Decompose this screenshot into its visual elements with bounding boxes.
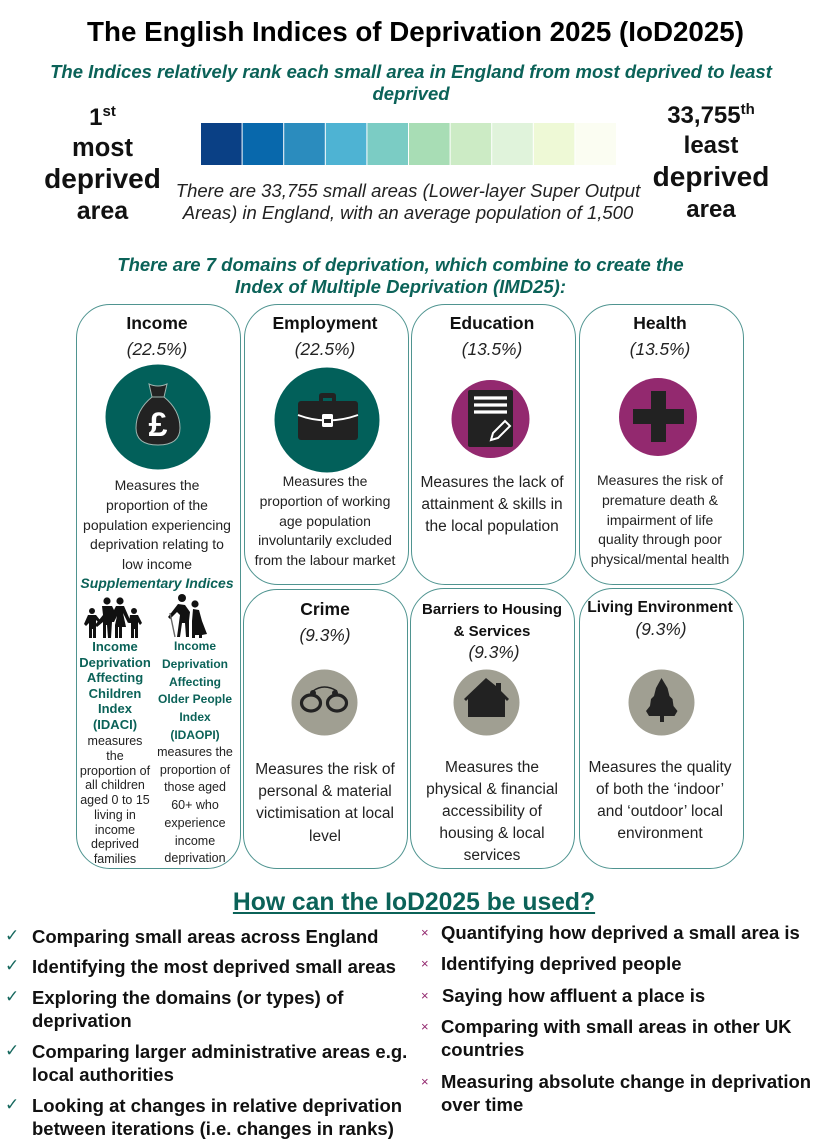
domains heading: Index of Multiple Deprivation (IMD25):: [235, 276, 566, 297]
label: 1st most deprived area: area: [77, 197, 128, 225]
IDACI title: Affecting: [87, 670, 143, 685]
label: 1st most deprived area: most: [72, 134, 133, 162]
check item: ✓: [5, 926, 19, 945]
income description: low income: [122, 556, 192, 572]
icon: family: [84, 597, 142, 638]
list: appropriate uses: [5, 926, 407, 1139]
health description: quality through poor: [598, 531, 722, 547]
cross item: [421, 1071, 811, 1115]
IDAOPI description: those aged: [164, 780, 226, 794]
employment description: from the labour market: [255, 552, 395, 568]
education description: the local population: [425, 518, 559, 535]
IDAOPI title: Older People: [158, 692, 232, 706]
living environment heading: Living Environment: [587, 599, 733, 616]
check item: ✓: [5, 987, 19, 1006]
domains heading: [117, 254, 684, 297]
domains heading: There are 7 domains of deprivation, which combine to create the: [117, 254, 684, 275]
health description: physical/mental health: [591, 551, 729, 567]
subtitle: The Indices relatively rank each small area in England from most deprived to least: [50, 61, 772, 82]
colour scale bar: [201, 123, 616, 165]
check item: Identifying the most deprived small areas: [32, 956, 396, 977]
IDACI description: deprived: [91, 837, 139, 851]
education description: attainment & skills in: [421, 496, 563, 513]
panel: income: [76, 304, 241, 869]
health description: premature death &: [602, 492, 718, 508]
subtitle: deprived: [372, 83, 450, 104]
supplementary heading: Supplementary Indices: [80, 575, 234, 591]
income description: [83, 477, 231, 572]
usage heading: How can the IoD2025 be used?: [233, 889, 595, 916]
panel: living environment: [579, 588, 744, 869]
cross item: over time: [441, 1094, 523, 1115]
barriers description: accessibility of: [442, 803, 542, 820]
cross item: [421, 1016, 792, 1060]
crime description: level: [309, 828, 341, 845]
education description: [420, 474, 564, 535]
income heading: Income: [126, 313, 188, 333]
cross item: ×: [421, 988, 429, 1003]
IDACI description: [80, 734, 150, 866]
IDACI title: [79, 639, 151, 732]
IDACI description: all children: [85, 778, 145, 792]
icon: handcuffs: [292, 670, 358, 736]
subtitle: [50, 61, 772, 104]
IDAOPI description: [157, 745, 233, 865]
health description: Measures the risk of: [597, 472, 723, 488]
barriers description: [426, 759, 558, 864]
employment description: Measures the: [283, 473, 367, 489]
cross item: Quantifying how deprived a small area is: [441, 922, 800, 943]
scale caption: [176, 180, 641, 223]
crime description: [255, 761, 395, 845]
IDAOPI description: 60+ who: [171, 798, 219, 812]
IDACI title: Income: [92, 639, 138, 654]
IDACI description: living in: [94, 808, 136, 822]
IDAOPI title: (IDAOPI): [170, 728, 220, 742]
employment weight: (22.5%): [295, 339, 355, 359]
icon: money bag: [106, 364, 210, 470]
icon: older people: [168, 594, 207, 638]
icon: house: [454, 670, 520, 736]
icon: medical cross: [619, 378, 697, 456]
check item: ✓: [5, 1041, 19, 1060]
cross item: ×: [421, 1019, 429, 1034]
check item: Looking at changes in relative deprivation: [32, 1095, 402, 1116]
check item: Comparing small areas across England: [32, 926, 378, 947]
scale caption: There are 33,755 small areas (Lower-layer Super Output: [176, 180, 640, 201]
check item: ✓: [5, 1095, 19, 1114]
icon: money bag: £: [149, 406, 168, 444]
panel: barriers: [410, 588, 575, 869]
employment heading: Employment: [272, 313, 378, 333]
panel: employment: [244, 304, 409, 585]
list: inappropriate uses: [421, 922, 811, 1115]
living environment description: [588, 759, 732, 842]
IDAOPI description: income: [175, 834, 215, 848]
income description: population experiencing: [83, 517, 231, 533]
IDAOPI description: experience: [164, 816, 226, 830]
barriers description: Measures the: [445, 759, 539, 776]
IDACI title: Deprivation: [79, 654, 151, 670]
cross item: ×: [421, 956, 429, 971]
label: 33,755th least deprived area: deprived: [653, 161, 769, 192]
label: 1st most deprived area: [44, 103, 161, 225]
IDACI description: the: [106, 749, 124, 763]
employment description: proportion of working: [260, 493, 390, 509]
check item: between iterations (i.e. changes in ranks): [32, 1118, 394, 1139]
education description: Measures the lack of: [420, 474, 564, 491]
icon: notebook and pencil: [452, 380, 530, 458]
employment description: involuntarily excluded: [258, 532, 392, 548]
check item: deprivation: [32, 1010, 132, 1031]
health weight: (13.5%): [630, 339, 690, 359]
label: 33,755th least deprived area: area: [686, 196, 736, 223]
cross item: ×: [421, 925, 429, 940]
barriers weight: (9.3%): [469, 642, 519, 662]
crime weight: (9.3%): [300, 625, 350, 645]
employment description: [254, 473, 396, 568]
education weight: (13.5%): [462, 339, 522, 359]
IDACI description: income: [95, 822, 135, 836]
employment description: age population: [279, 513, 371, 529]
IDAOPI title: Affecting: [169, 675, 221, 689]
IDAOPI title: Deprivation: [162, 657, 228, 671]
barriers description: physical & financial: [426, 781, 558, 798]
cross item: Saying how affluent a place is: [442, 985, 705, 1006]
income description: Measures the: [115, 477, 199, 493]
barriers heading: [422, 601, 562, 640]
IDAOPI description: proportion of: [160, 763, 230, 777]
check item: Comparing larger administrative areas e.g.: [32, 1041, 407, 1062]
crime description: victimisation at local: [256, 805, 394, 822]
check item: [5, 1095, 402, 1139]
living environment description: environment: [617, 825, 703, 842]
label: 33,755th least deprived area: least: [684, 132, 738, 159]
title: The English Indices of Deprivation 2025 (IoD2025): [87, 16, 744, 47]
income description: proportion of the: [106, 497, 208, 513]
check item: ✓: [5, 956, 19, 975]
panel: health: [579, 304, 744, 585]
cross item: ×: [421, 1074, 429, 1089]
income weight: (22.5%): [127, 339, 187, 359]
living environment description: of both the ‘indoor’: [596, 781, 724, 798]
IDAOPI description: measures the: [157, 745, 233, 759]
IDACI title: Children: [89, 686, 141, 700]
icon: tree: [628, 670, 694, 736]
IDAOPI description: deprivation: [164, 851, 226, 865]
education heading: Education: [450, 313, 534, 333]
health heading: Health: [633, 313, 687, 333]
living environment description: Measures the quality: [588, 759, 732, 776]
scale caption: Areas) in England, with an average population of 1,500: [183, 202, 633, 223]
icon: briefcase: [274, 368, 380, 472]
IDACI description: aged 0 to 15: [80, 793, 150, 807]
cross item: Identifying deprived people: [441, 953, 682, 974]
check item: local authorities: [32, 1064, 174, 1085]
IDAOPI title: [158, 639, 232, 742]
check item: [5, 1041, 407, 1085]
cross item: countries: [441, 1039, 524, 1060]
panel: crime: [243, 589, 408, 869]
income description: deprivation relating to: [90, 536, 224, 552]
crime description: personal & material: [258, 783, 392, 800]
barriers heading: Barriers to Housing: [422, 601, 562, 618]
barriers heading: & Services: [454, 622, 530, 640]
IDACI description: measures: [88, 734, 142, 748]
label: 33,755th least deprived area: 33,755th: [667, 101, 755, 129]
barriers description: services: [464, 847, 520, 864]
check item: [5, 987, 344, 1031]
panel: education: [411, 304, 576, 585]
label: 33,755th least deprived area: [653, 101, 769, 223]
label: 1st most deprived area: deprived: [44, 163, 161, 194]
health description: [591, 472, 729, 567]
IDACI description: families: [94, 852, 136, 866]
cross item: Measuring absolute change in deprivation: [441, 1071, 811, 1092]
living environment description: and ‘outdoor’ local: [597, 803, 723, 820]
cross item: Comparing with small areas in other UK: [441, 1016, 792, 1037]
living environment weight: (9.3%): [636, 619, 686, 639]
IDACI description: proportion of: [80, 764, 150, 778]
crime heading: Crime: [300, 599, 350, 619]
crime description: Measures the risk of: [255, 761, 395, 778]
label: 1st most deprived area: 1st: [89, 103, 116, 131]
check item: Exploring the domains (or types) of: [32, 987, 343, 1008]
IDAOPI title: Index: [179, 710, 211, 724]
barriers description: housing & local: [439, 825, 545, 842]
IDAOPI title: Income: [174, 639, 216, 653]
health description: impairment of life: [607, 512, 713, 528]
IDACI title: Index: [98, 701, 132, 716]
IDACI title: (IDACI): [93, 716, 137, 732]
